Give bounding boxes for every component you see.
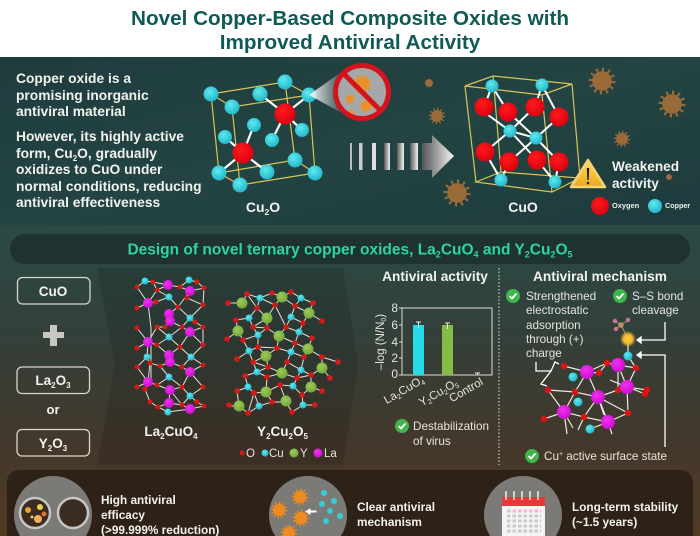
label: La2CuO4: CuO [165, 424, 193, 439]
precursor box: La2O3: La [35, 373, 51, 388]
label: weakened activity: Weakened [612, 159, 679, 174]
benefit: clear antiviral mechanism [269, 476, 435, 536]
crystal: La2CuO4 [134, 276, 206, 416]
banner: O [555, 242, 568, 258]
banner: Cu [530, 242, 550, 258]
check: electrostatic adsorption: charge [526, 347, 562, 360]
bar chart: antiviral activity: CuO [397, 376, 423, 398]
benefit: long-term stability: (~1.5 years) [572, 515, 637, 529]
icon: warning [571, 160, 605, 187]
precursor box: La2O3 [17, 367, 90, 394]
check: electrostatic adsorption: Strengthened [526, 290, 596, 303]
bar chart: antiviral activity: Cu [427, 386, 446, 403]
bracket: charge [536, 362, 559, 386]
bar chart: antiviral activity: 2 [443, 389, 450, 397]
check: S-S bond cleavage: cleavage [632, 304, 679, 317]
legend: elements: O [246, 448, 255, 460]
intro text: However, its highly active [16, 129, 184, 144]
mechanism structure [541, 318, 650, 434]
bar chart: antiviral activity: O [443, 379, 457, 394]
intro text: 2 [73, 154, 78, 163]
arrow: oxidation [350, 135, 454, 178]
precursor box: CuO: CuO [39, 284, 67, 299]
heading: antiviral mechanism: Antiviral mechanism [533, 269, 667, 284]
bar chart: antiviral activity: 2 [396, 393, 403, 401]
icon: plus [43, 325, 64, 346]
bar chart: antiviral activity: 2 [427, 398, 434, 406]
label: Cu2O: O [269, 199, 280, 215]
check: S-S bond cleavage: S–S bond [632, 290, 683, 303]
bar chart: antiviral activity: 2 [391, 351, 398, 365]
legend: elements: Y [300, 448, 308, 460]
divider [498, 268, 500, 465]
bar chart: antiviral activity: 0 [391, 367, 398, 381]
legend: elements: La [324, 448, 337, 460]
title [131, 7, 569, 54]
intro text: antiviral material [16, 104, 126, 119]
benefit: high antiviral efficacy: High antiviral [101, 493, 176, 507]
label: La2CuO4: La [144, 424, 160, 439]
bar chart: antiviral activity: 8 [391, 301, 398, 315]
banner: CuO [441, 242, 474, 258]
bar chart: antiviral activity: ) [375, 314, 387, 318]
bar chart: antiviral activity: 0 [381, 318, 388, 322]
label: weakened activity [612, 159, 679, 191]
benefit: long-term stability [484, 476, 679, 536]
legend: elements: Cu [269, 448, 284, 460]
check: Cu+ active surface state [525, 449, 667, 463]
arrow: Cu+ active surface state [637, 352, 665, 447]
banner: 2 [525, 250, 530, 260]
check: electrostatic adsorption [506, 289, 596, 360]
banner [10, 234, 690, 264]
legend: atoms: Copper [665, 201, 690, 210]
arrow: S-S bond cleavage [637, 322, 665, 343]
label: Y2Cu2O5: 2 [289, 432, 294, 441]
label: or: or [46, 402, 60, 417]
benefit: clear antiviral mechanism: Clear antiviral [357, 500, 435, 514]
label: La2CuO4: 4 [193, 432, 198, 441]
background: white header [0, 0, 700, 57]
bar chart: antiviral activity: 5 [454, 382, 461, 390]
crystal: Y2Cu2O5 [224, 289, 341, 416]
check: destabilization: of virus [413, 435, 451, 448]
panel: design background [0, 225, 700, 536]
banner: 2 [550, 250, 555, 260]
viruses: background [425, 70, 683, 204]
benefit: long-term stability: Long-term stability [572, 500, 679, 514]
intro text: normal conditions, reducing [16, 179, 202, 194]
title: Improved Antiviral Activity [220, 31, 481, 54]
panel: key benefits [7, 470, 693, 536]
bar chart: antiviral activity: 6 [391, 318, 398, 332]
banner: 4 [474, 250, 479, 260]
check: destabilization: Destabilization [413, 420, 489, 433]
crystal: Cu2O unit cell [204, 74, 322, 192]
check: Cu+ active surface state: + [559, 451, 563, 458]
intro text: antiviral effectiveness [16, 195, 161, 210]
intro text: promising inorganic [16, 88, 149, 103]
check: electrostatic adsorption: through (+) [526, 333, 584, 346]
intro text [16, 71, 202, 210]
label: Y2Cu2O5: Cu [271, 424, 289, 439]
check: S-S bond cleavage [613, 289, 683, 317]
banner: 2 [436, 250, 441, 260]
precursor box: Y2O3 [17, 430, 90, 456]
check: destabilization [395, 419, 489, 448]
intro text: O, gradually [77, 146, 157, 161]
precursor box: Y2O3: O [52, 436, 63, 451]
label: Y2Cu2O5: 2 [266, 432, 271, 441]
precursor box: La2O3: O [56, 373, 66, 388]
label: weakened activity: activity [612, 176, 659, 191]
label: CuO: CuO [508, 199, 538, 215]
banner: and Y [479, 242, 525, 258]
bar chart: antiviral activity: 4 [391, 335, 398, 349]
title: Novel Copper-Based Composite Oxides with [131, 7, 569, 30]
precursor box: Y2O3: 3 [63, 444, 68, 453]
label: Y2Cu2O5: O [293, 424, 303, 439]
legend: elements [240, 448, 337, 460]
precursor box: Y2O3: 2 [48, 444, 53, 453]
heading: antiviral activity: Antiviral activity [382, 269, 488, 284]
precursor box: CuO [18, 278, 90, 304]
bar chart: antiviral activity: –log (N/N [375, 322, 387, 370]
benefit: clear antiviral mechanism: mechanism [357, 515, 422, 529]
bar chart: antiviral activity: 4 [420, 379, 427, 387]
intro text: form, Cu [16, 146, 73, 161]
check: Cu+ active surface state: active surface state [563, 450, 667, 463]
banner: Design of novel ternary copper oxides, La [127, 242, 436, 258]
benefit: high antiviral efficacy: efficacy [101, 508, 145, 522]
banner: 5 [568, 250, 573, 260]
callout: inactive virus [309, 66, 388, 118]
panel: left chevron [97, 268, 358, 465]
label: Cu2O: 2 [265, 207, 270, 217]
label: Y2Cu2O5: Y [257, 424, 266, 439]
precursor box: La2O3: 2 [51, 381, 56, 390]
check: electrostatic adsorption: adsorption [526, 319, 581, 332]
benefit: high antiviral efficacy [14, 476, 219, 536]
bar chart: antiviral activity: Control [447, 376, 486, 405]
panel: problem with copper oxide [0, 57, 700, 225]
check: Cu+ active surface state: Cu [544, 450, 559, 463]
label: Cu2O: Cu [246, 199, 265, 215]
legend: atoms: Oxygen [612, 201, 640, 210]
bar chart: antiviral activity: Y [417, 395, 430, 409]
precursor box: Y2O3: Y [39, 436, 48, 451]
label: Y2Cu2O5: 5 [303, 432, 308, 441]
label: La2CuO4: 2 [160, 432, 165, 441]
bar chart: antiviral activity: La [382, 390, 399, 407]
legend: atoms [591, 197, 690, 215]
intro text: Copper oxide is a [16, 71, 131, 86]
crystal: CuO unit cell [465, 76, 580, 192]
bar chart: antiviral activity [375, 301, 492, 410]
check: electrostatic adsorption: electrostatic [526, 304, 589, 317]
precursor box: La2O3: 3 [66, 381, 71, 390]
intro text: oxidizes to CuO under [16, 162, 163, 177]
